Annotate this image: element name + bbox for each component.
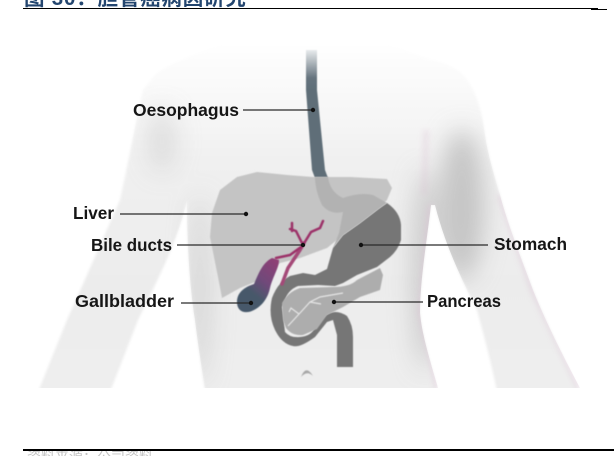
bottom rule bbox=[23, 449, 614, 451]
label: Liver: Liver bbox=[73, 203, 114, 223]
label: Bile ducts bbox=[91, 235, 305, 255]
organ: liver bbox=[210, 172, 392, 298]
navel bbox=[301, 370, 313, 377]
organ: oesophagus bbox=[306, 50, 328, 178]
label: Oesophagus: Oesophagus bbox=[133, 100, 239, 120]
label: Oesophagus bbox=[133, 100, 315, 120]
label: Gallbladder: Gallbladder bbox=[75, 291, 174, 311]
label: Stomach bbox=[359, 234, 567, 254]
label: Pancreas bbox=[332, 291, 501, 311]
organ: stomach overlap seen through liver bbox=[315, 177, 387, 248]
organ: pancreas bbox=[282, 268, 383, 335]
top rule bbox=[23, 8, 607, 10]
label: Stomach: Stomach bbox=[494, 234, 567, 254]
label: Bile ducts: Bile ducts bbox=[91, 235, 172, 255]
organ: pancreatic duct bbox=[288, 293, 343, 326]
label: Gallbladder bbox=[75, 291, 253, 311]
label: Pancreas: Pancreas bbox=[427, 291, 501, 311]
torso and arms silhouette bbox=[40, 94, 580, 388]
organ: bile ducts bbox=[276, 221, 323, 284]
organ: stomach and duodenum bbox=[271, 203, 401, 367]
organ: gallbladder bbox=[237, 258, 279, 312]
label: Liver bbox=[73, 203, 248, 223]
